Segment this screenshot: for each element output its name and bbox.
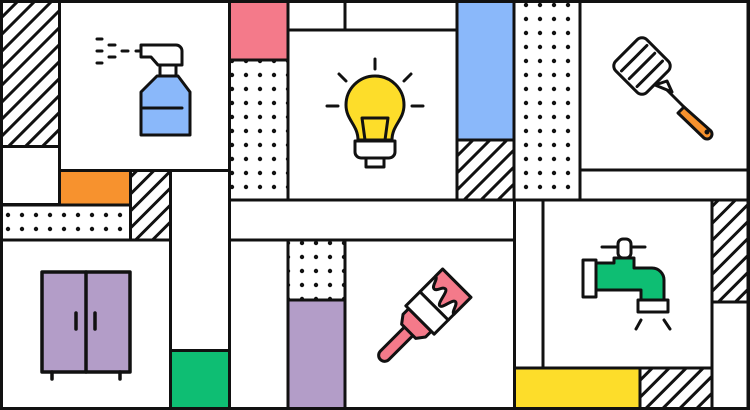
icon: spatula [611, 35, 712, 139]
icon: faucet [583, 239, 670, 329]
icon: spray bottle [97, 39, 190, 135]
icon: paint brush [366, 269, 471, 374]
icon: light bulb [327, 59, 423, 167]
icon: cabinet [42, 272, 130, 379]
